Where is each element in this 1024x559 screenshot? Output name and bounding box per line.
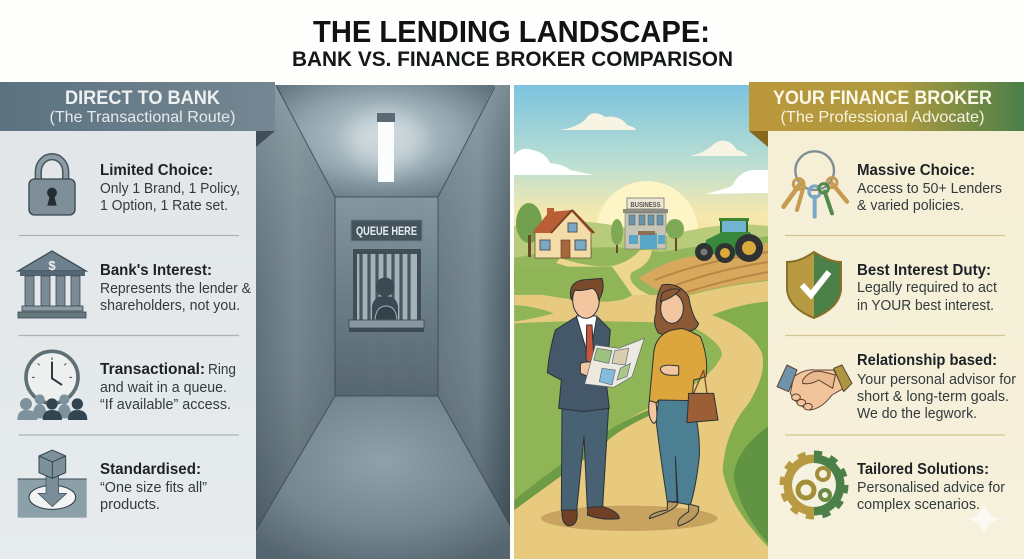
rolling hills bbox=[514, 221, 768, 320]
item: bank's interest: Represents the lender & bbox=[100, 281, 251, 297]
ceiling bbox=[275, 85, 495, 197]
item: relationship based bbox=[777, 352, 1016, 422]
left wall bbox=[256, 85, 335, 530]
item: standardised: Standardised: bbox=[100, 461, 201, 478]
title bbox=[292, 15, 733, 71]
item: massive choice: Access to 50+ Lenders bbox=[857, 181, 1002, 197]
tractor bbox=[695, 218, 763, 263]
business building: BUSINESS bbox=[630, 200, 660, 209]
item: standardised: products. bbox=[100, 497, 160, 513]
winding road upper bbox=[556, 250, 662, 302]
right wall bbox=[438, 85, 510, 525]
ploughed field bbox=[639, 243, 768, 297]
item: relationship based: Your personal advisor for bbox=[857, 372, 1016, 388]
item: massive choice: & varied policies. bbox=[857, 198, 964, 214]
item: bank's interest: shareholders, not you. bbox=[100, 298, 240, 314]
item: limited choice bbox=[29, 157, 240, 215]
item: transactional bbox=[17, 351, 236, 420]
title: BANK VS. FINANCE BROKER COMPARISON bbox=[292, 47, 733, 71]
item: limited choice: Only 1 Brand, 1 Policy, bbox=[100, 181, 240, 197]
silhouette behind window bbox=[372, 278, 398, 320]
icon: shield with tick bbox=[787, 252, 841, 318]
header banner: your finance broker: (The Professional Advocate) bbox=[780, 109, 984, 126]
sign: queue here bbox=[351, 220, 422, 241]
header banner: direct to bank: DIRECT TO BANK bbox=[65, 87, 220, 109]
bush bbox=[515, 270, 551, 283]
concrete texture bbox=[256, 197, 510, 397]
icon: square peg in round hole bbox=[18, 450, 87, 518]
foreground in zoom coordinates bbox=[514, 267, 768, 559]
ground shadow bbox=[541, 506, 718, 531]
item: tailored solutions bbox=[783, 454, 1005, 516]
woman bbox=[649, 284, 718, 526]
item: transactional: “If available” access. bbox=[100, 397, 231, 413]
floor bbox=[256, 396, 510, 559]
item: tailored solutions: Personalised advice for bbox=[857, 480, 1005, 496]
panel: direct to bank bbox=[0, 82, 275, 559]
item: best interest duty: in YOUR best interest. bbox=[857, 298, 994, 314]
item: bank's interest: Bank's Interest: bbox=[100, 262, 212, 279]
icon: gears bbox=[783, 454, 845, 516]
header banner: direct to bank bbox=[0, 82, 275, 147]
item: best interest duty bbox=[787, 252, 997, 318]
item: standardised: “One size fits all” bbox=[100, 480, 207, 496]
icon: bunch of keys bbox=[784, 151, 847, 217]
header banner: your finance broker: YOUR FINANCE BROKER bbox=[773, 87, 992, 109]
item: tailored solutions: Tailored Solutions: bbox=[857, 461, 989, 478]
sparkle watermark bbox=[968, 503, 1000, 535]
clouds bbox=[560, 113, 748, 156]
panel: corridor illustration bbox=[256, 85, 510, 559]
item: bank's interest bbox=[18, 251, 251, 318]
item: transactional: Transactional: bbox=[100, 361, 205, 378]
item: relationship based: short & long-term goals. bbox=[857, 389, 1009, 405]
header banner: your finance broker bbox=[749, 82, 1024, 147]
map bbox=[585, 338, 644, 387]
icon: bank building: $ bbox=[48, 258, 56, 273]
item: transactional: and wait in a queue. bbox=[100, 380, 227, 396]
item: massive choice: Massive Choice: bbox=[857, 162, 975, 179]
panel: your finance broker bbox=[749, 82, 1024, 559]
path beyond the field bbox=[650, 281, 768, 316]
road and grass foreground bbox=[514, 267, 768, 559]
business building bbox=[611, 198, 684, 253]
icon: bank building bbox=[18, 251, 86, 318]
item: relationship based: Relationship based: bbox=[857, 352, 997, 369]
sun bbox=[596, 181, 698, 283]
service window with bars bbox=[349, 249, 424, 332]
icon: handshake bbox=[777, 365, 852, 410]
item: relationship based: We do the legwork. bbox=[857, 406, 977, 422]
item: standardised bbox=[18, 450, 207, 518]
icon: padlock bbox=[29, 157, 75, 215]
sign: queue here: QUEUE HERE bbox=[356, 226, 417, 238]
title: THE LENDING LANDSCAPE: bbox=[313, 15, 710, 49]
item: limited choice: 1 Option, 1 Rate set. bbox=[100, 198, 228, 214]
item: massive choice bbox=[784, 151, 1002, 217]
item: best interest duty: Legally required to act bbox=[857, 280, 997, 296]
back wall bbox=[335, 197, 438, 396]
icon: clock and queue bbox=[17, 351, 87, 420]
header banner: direct to bank: (The Transactional Route) bbox=[50, 109, 236, 126]
item: limited choice: Limited Choice: bbox=[100, 162, 213, 179]
item: transactional: Ring bbox=[208, 362, 236, 378]
item: best interest duty: Best Interest Duty: bbox=[857, 262, 991, 279]
ceiling light bbox=[346, 110, 426, 182]
panel: countryside illustration bbox=[514, 85, 768, 559]
house bbox=[516, 203, 594, 258]
man bbox=[547, 278, 619, 526]
item: tailored solutions: complex scenarios. bbox=[857, 497, 980, 513]
